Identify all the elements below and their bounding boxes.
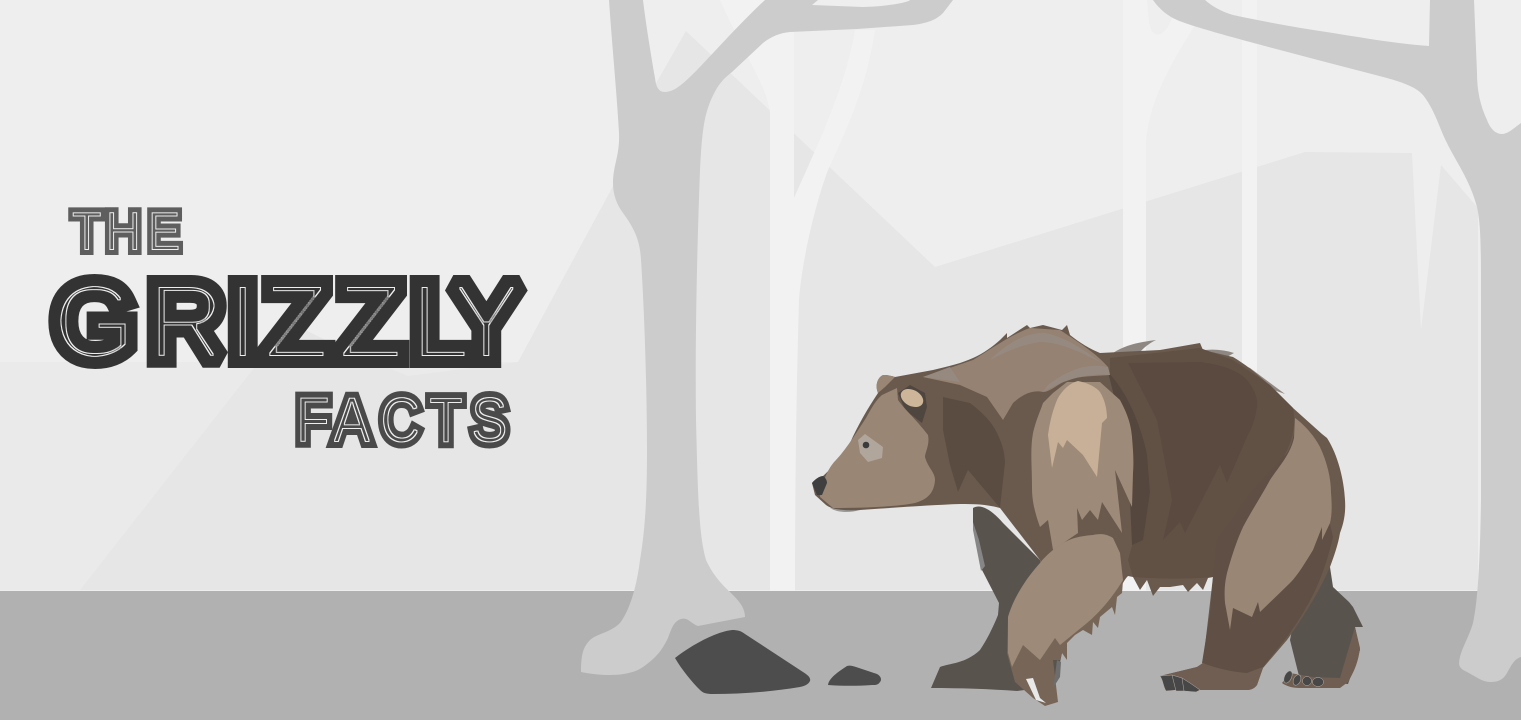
title word: THE: THE bbox=[72, 202, 181, 263]
foreleg bbox=[1008, 534, 1123, 667]
title bbox=[53, 202, 522, 456]
foreground tree: left bbox=[581, 0, 953, 675]
ground bbox=[0, 591, 1521, 720]
ear inner bbox=[898, 385, 926, 411]
hind foot claws bbox=[1160, 675, 1200, 692]
far rear paw bbox=[1282, 627, 1360, 688]
far rear paw claws bbox=[1282, 670, 1324, 686]
eye patch bbox=[858, 434, 883, 462]
shoulder shadow stripe bbox=[1108, 372, 1150, 545]
body silhouette bbox=[812, 325, 1345, 690]
rock: large bbox=[675, 630, 810, 694]
shoulder bbox=[1031, 382, 1133, 550]
bear illustration bbox=[812, 325, 1363, 706]
title word: FACTS: FACTS bbox=[296, 384, 508, 456]
ear dark surround bbox=[898, 385, 927, 423]
eye pupil bbox=[863, 442, 869, 448]
hind foot bbox=[1160, 663, 1263, 690]
grey back hair bbox=[1113, 340, 1285, 394]
rear leg dark bbox=[1202, 418, 1333, 673]
neck and back highlight bbox=[923, 328, 1110, 420]
foreground tree: right bbox=[1153, 0, 1521, 682]
far front leg bbox=[931, 507, 1062, 691]
haunch bbox=[1225, 418, 1332, 630]
torso dark patch bbox=[1128, 362, 1257, 540]
foreleg fur bbox=[1007, 580, 1123, 706]
neck dark patch bbox=[943, 397, 1005, 508]
shoulder tan patch bbox=[1048, 381, 1107, 477]
nose bbox=[812, 476, 827, 495]
ear bbox=[877, 375, 895, 393]
title word: GRIZZLY: GRIZZLY bbox=[53, 263, 522, 381]
grey sliver on far front leg bbox=[973, 522, 985, 571]
torso mid tone bbox=[1110, 348, 1294, 579]
rock: small bbox=[828, 666, 881, 686]
head bbox=[820, 388, 935, 508]
grey lip bbox=[830, 508, 860, 512]
grey paw sliver bbox=[1053, 660, 1061, 688]
far rear leg bbox=[1290, 567, 1363, 684]
grey shoulder highlights bbox=[923, 333, 1110, 392]
front claw bbox=[1026, 678, 1046, 703]
pale background trees bbox=[720, 0, 1257, 591]
